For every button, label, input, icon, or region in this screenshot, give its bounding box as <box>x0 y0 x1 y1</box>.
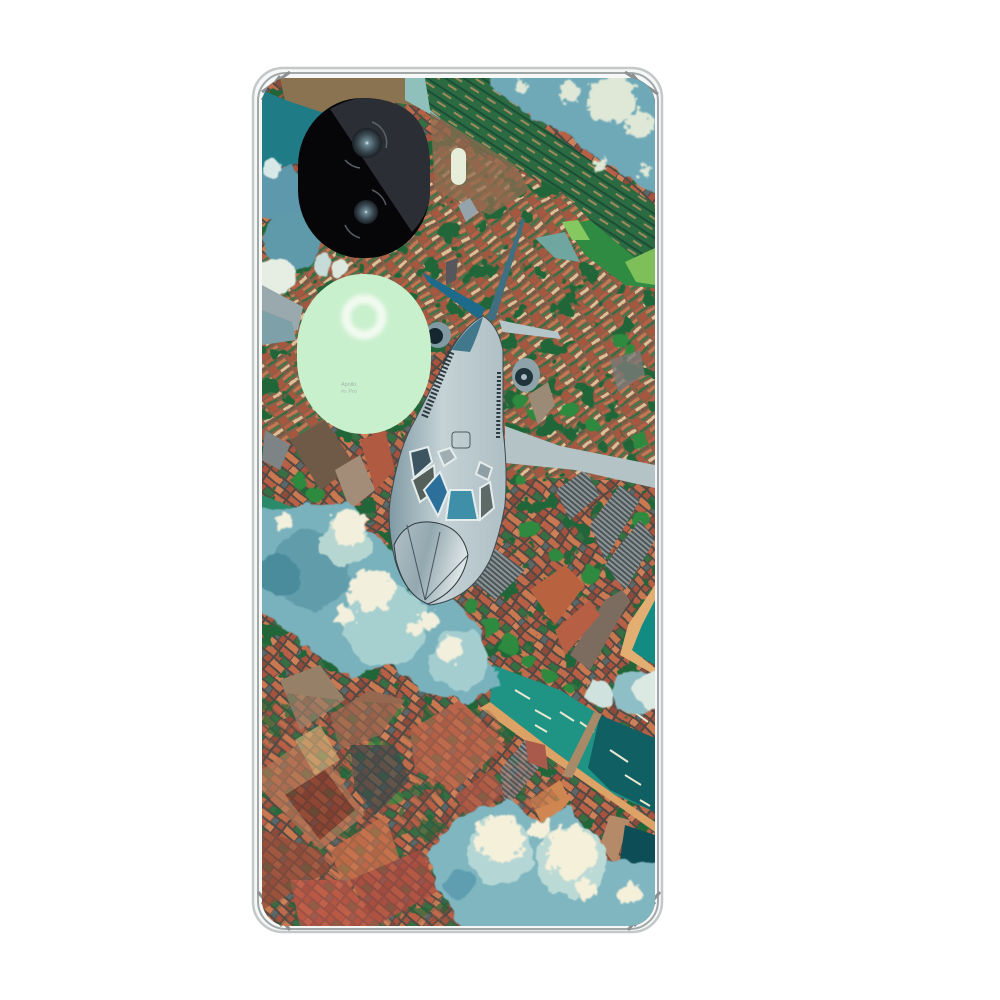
right wing <box>505 426 655 488</box>
nose panel lines <box>407 525 468 600</box>
far wing cloud shadow <box>262 310 296 345</box>
phone case frame <box>253 68 662 932</box>
river <box>480 665 655 832</box>
bottom right cloud <box>426 798 655 926</box>
dark tower <box>446 258 458 285</box>
camera module <box>298 98 430 258</box>
ring logo <box>346 299 382 335</box>
upper left shore <box>280 78 415 112</box>
faint label line two: #x Pro <box>341 389 357 395</box>
far wing <box>262 285 303 331</box>
roof detail overlay on lower city <box>262 690 560 926</box>
upper city, fine street grid <box>262 132 655 480</box>
scattered greenery <box>262 78 655 926</box>
engine left <box>428 322 451 348</box>
central lower blocks <box>280 665 570 830</box>
lower left cloud <box>250 505 500 702</box>
left side low blocks <box>262 420 395 510</box>
engine right <box>512 358 540 392</box>
city base <box>262 78 655 926</box>
window row left <box>424 352 451 418</box>
lower lens <box>345 190 386 238</box>
left stabilizer <box>422 272 485 320</box>
east coast water <box>620 585 655 675</box>
glossy diagonal panel <box>330 98 430 232</box>
hatch <box>452 432 470 448</box>
dark harbour <box>620 825 655 864</box>
tail fin <box>486 218 525 320</box>
right stabilizer <box>499 320 561 339</box>
upper lens <box>345 122 387 168</box>
top right clouds <box>489 78 655 194</box>
case artwork: aerial city <box>262 78 655 926</box>
park <box>535 220 655 288</box>
brown suburb patch <box>430 112 530 215</box>
window row right <box>498 372 499 440</box>
green logo oval <box>297 274 431 434</box>
airplane <box>262 218 655 605</box>
bridge <box>562 712 602 778</box>
dark top of fuselage <box>452 317 483 352</box>
left cloud <box>262 156 350 295</box>
nose cone <box>394 522 468 604</box>
fuselage <box>389 316 506 605</box>
office towers right <box>465 350 655 670</box>
green fields band <box>425 78 655 257</box>
right cloud <box>584 670 655 715</box>
flash <box>451 148 466 185</box>
upper lagoon <box>405 78 445 120</box>
upper left water <box>262 92 322 172</box>
lower left palace blocks <box>262 725 440 926</box>
tree clusters <box>291 333 648 805</box>
cockpit windows <box>410 447 494 520</box>
solid ground colour <box>262 78 655 926</box>
pier <box>600 815 630 865</box>
faint label: Apollo <box>341 382 356 388</box>
building at top <box>458 198 478 222</box>
